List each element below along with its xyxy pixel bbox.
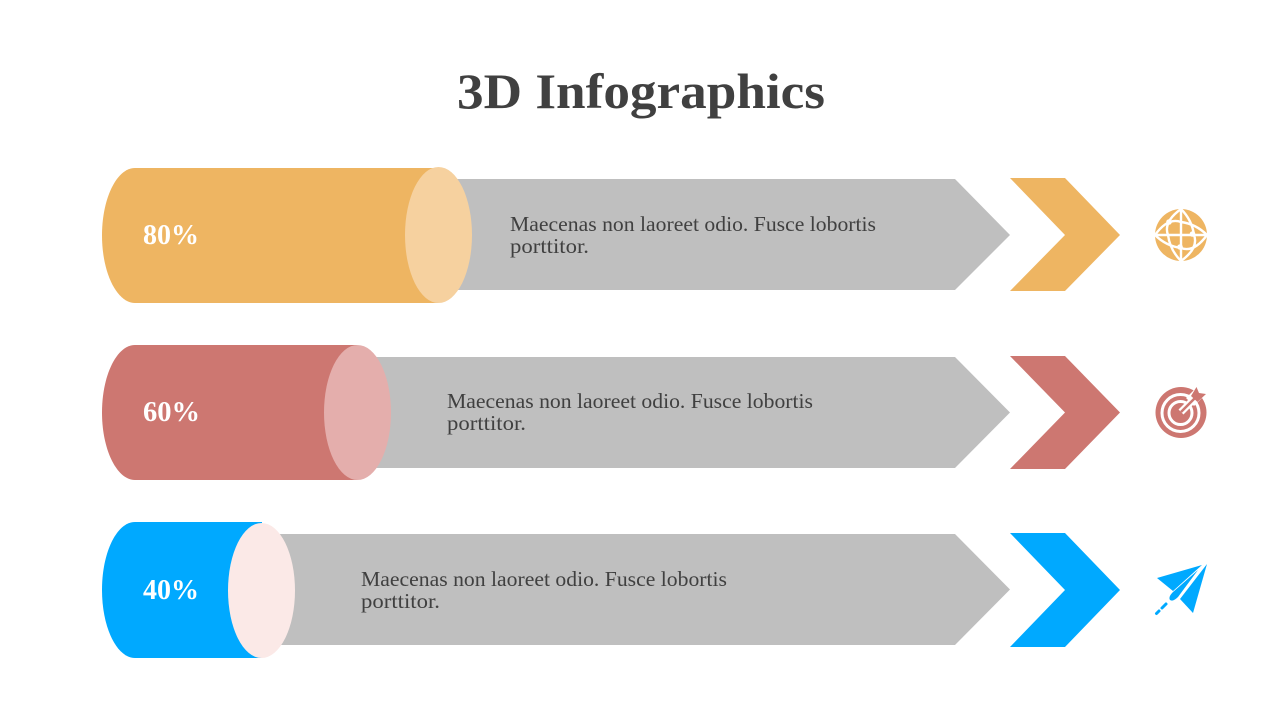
percentage: 40% — [143, 575, 199, 606]
cylinder body — [102, 522, 262, 658]
description text — [510, 212, 876, 258]
cylinder body — [102, 168, 438, 303]
description text: Maecenas non laoreet odio. Fusce lobortis — [361, 567, 727, 591]
percentage: 60% — [143, 397, 200, 428]
grey arrow — [255, 534, 1010, 645]
description text: porttitor. — [447, 411, 526, 435]
chevron — [1010, 356, 1120, 469]
grey arrow — [430, 179, 1010, 290]
chevron — [1010, 533, 1120, 647]
cylinder body — [102, 345, 357, 480]
description text: Maecenas non laoreet odio. Fusce lobortis — [447, 389, 813, 413]
title: 3D Infographics — [457, 63, 825, 119]
icon: paper plane — [1156, 564, 1207, 614]
grey arrow — [350, 357, 1010, 468]
description text — [361, 567, 727, 613]
percentage: 80% — [143, 220, 199, 251]
description text — [447, 389, 813, 435]
description text: porttitor. — [510, 234, 589, 258]
description text: porttitor. — [361, 589, 440, 613]
row 1: 80% — [102, 167, 1207, 303]
cylinder end — [228, 523, 295, 658]
icon: globe — [1155, 209, 1207, 261]
cylinder end — [324, 345, 391, 480]
row 2: 60% — [102, 345, 1207, 480]
description text: Maecenas non laoreet odio. Fusce lobortis — [510, 212, 876, 236]
row 3: 40% — [102, 522, 1207, 658]
chevron — [1010, 178, 1120, 291]
icon: target — [1156, 385, 1207, 438]
cylinder end — [405, 167, 472, 303]
